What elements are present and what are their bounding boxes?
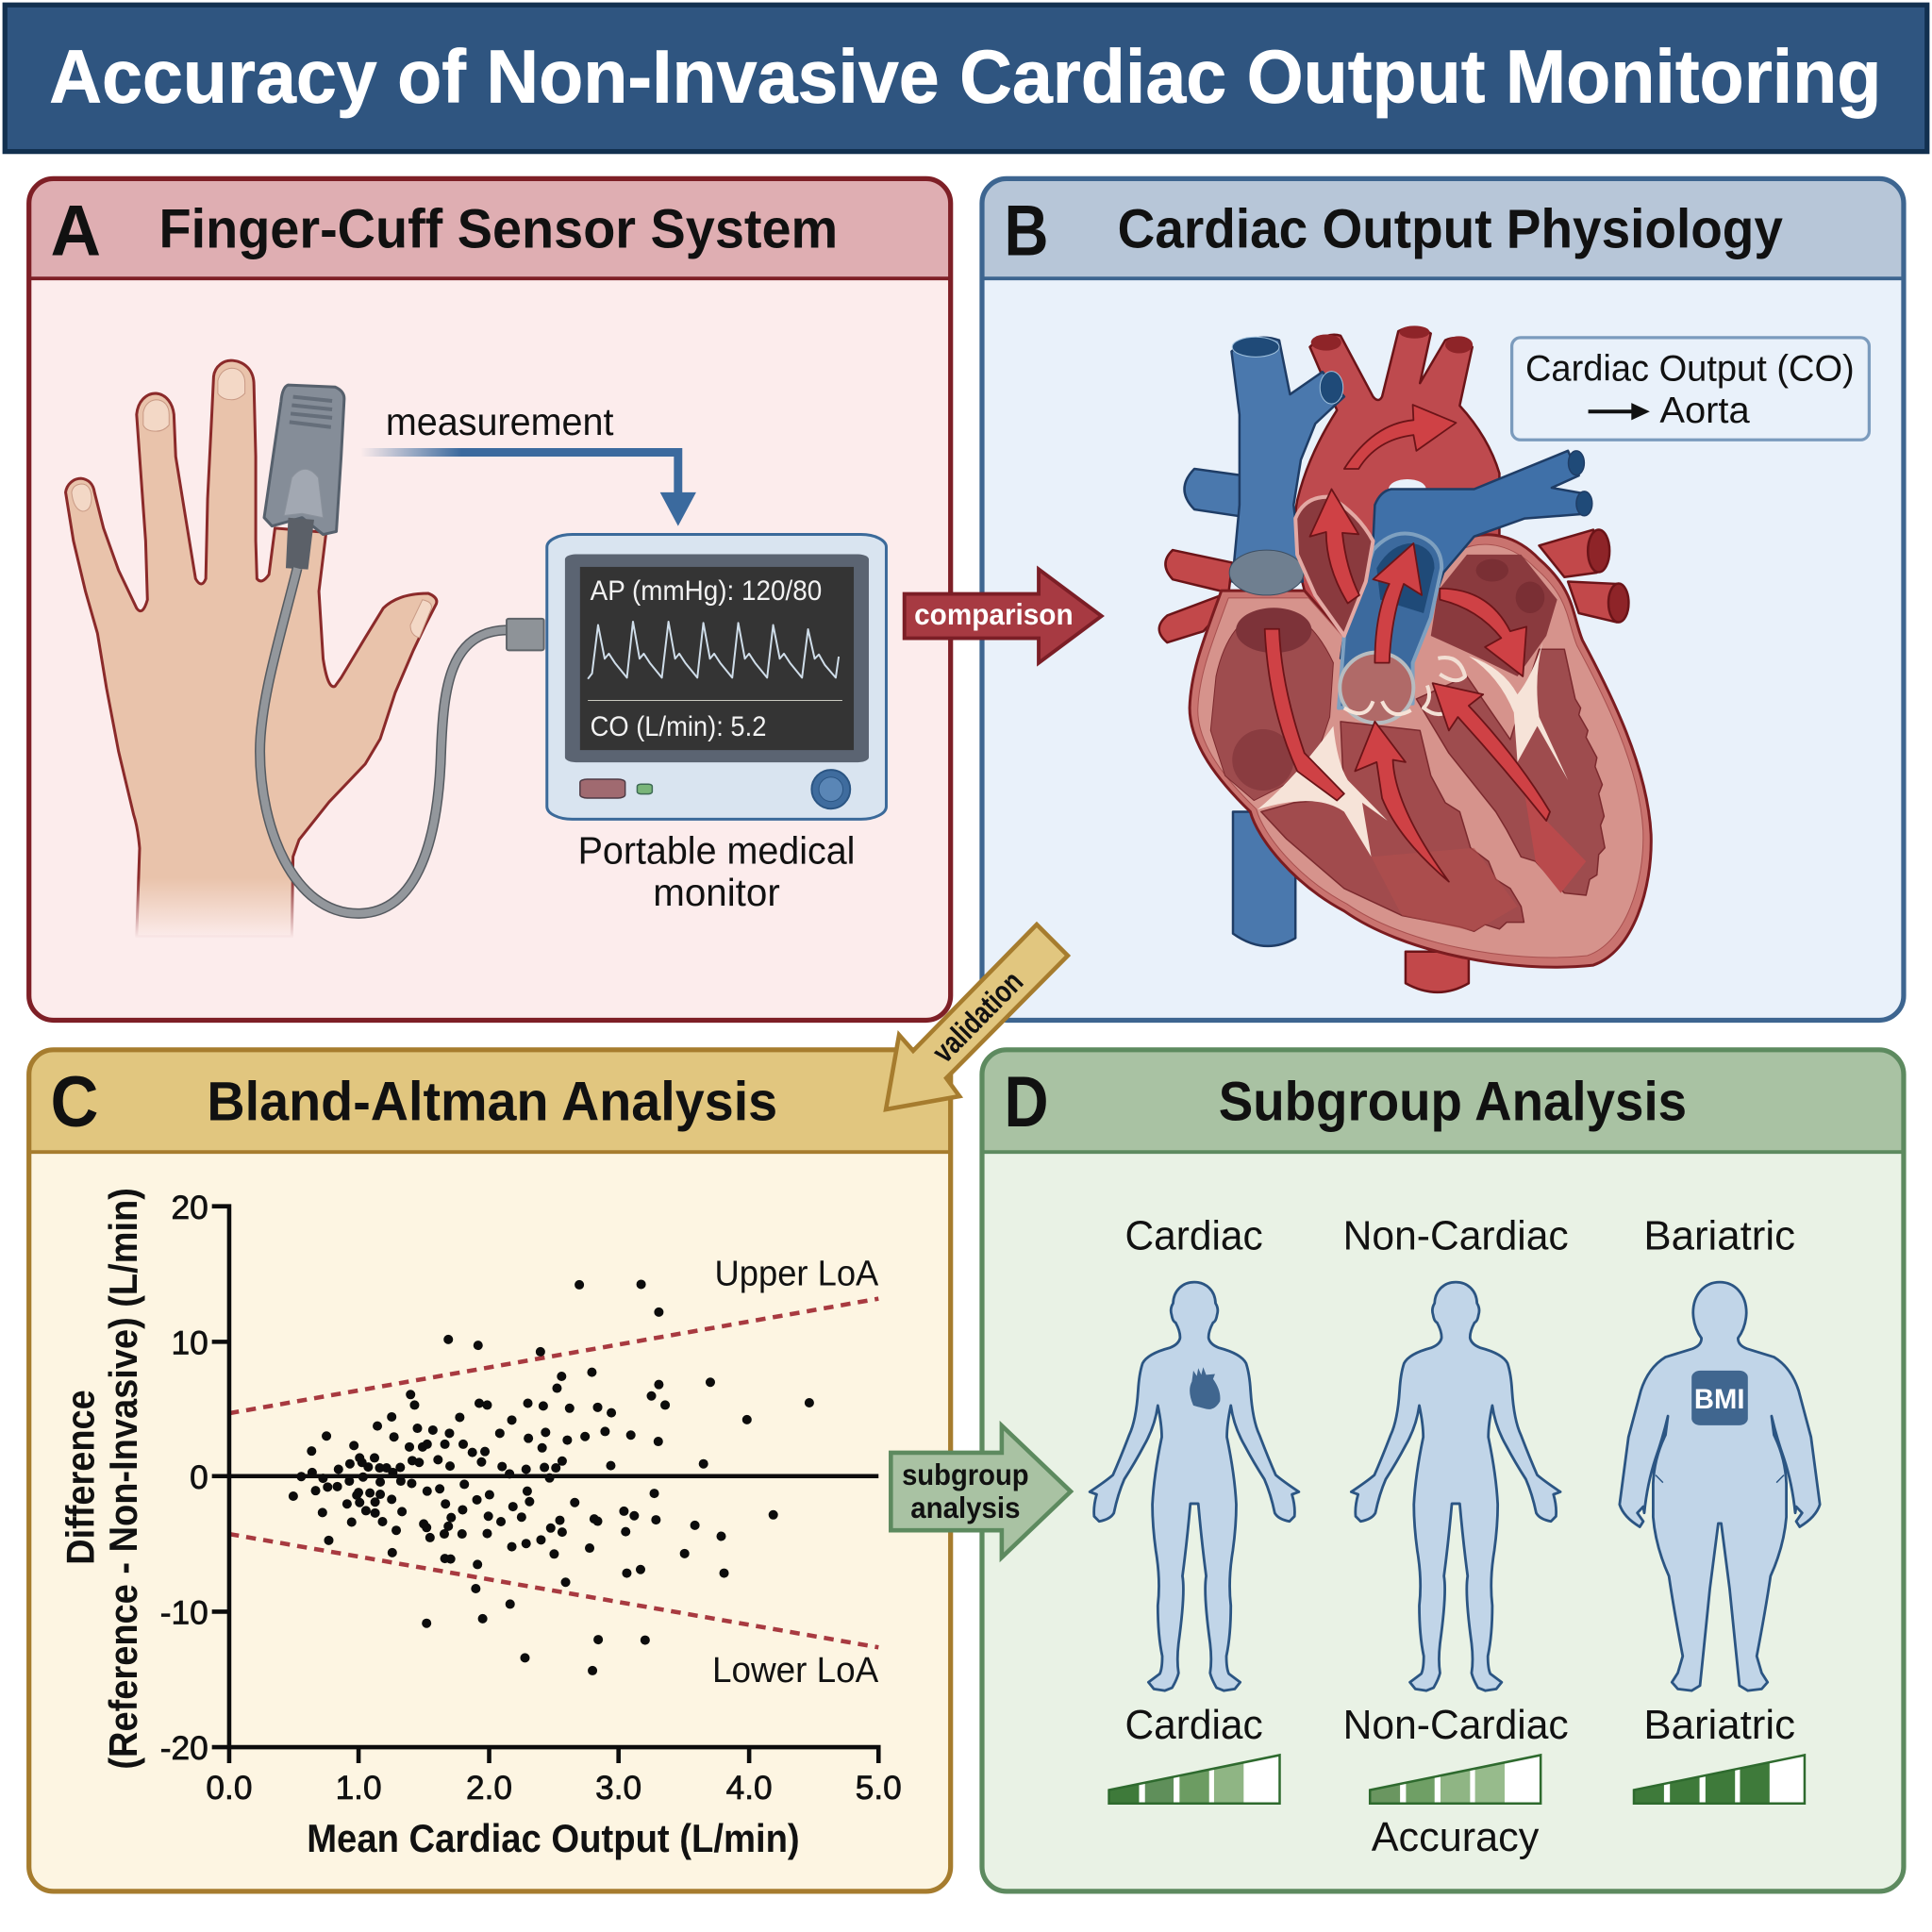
y axis title: Difference	[58, 1390, 102, 1565]
panel D: subgroup analysis	[982, 1050, 1904, 1891]
limits of agreement lines	[229, 1299, 878, 1647]
accuracy label: Accuracy	[1372, 1815, 1540, 1860]
monitor caption: monitor	[653, 871, 780, 914]
figure: cardiac patient	[1090, 1282, 1299, 1690]
y axis tick labels: -20	[160, 1730, 208, 1767]
arrow: subgroup analysis: subgroup	[902, 1458, 1029, 1491]
measurement arrow: measurement	[386, 400, 613, 443]
y axis tick labels	[160, 1190, 208, 1767]
arrow: subgroup analysis	[891, 1425, 1071, 1557]
axes	[212, 1207, 878, 1763]
panel B heading: Cardiac Output Physiology	[1118, 199, 1783, 260]
panel A: finger-cuff sensor system	[29, 178, 951, 1020]
subgroup bottom labels: Bariatric	[1643, 1703, 1795, 1748]
accuracy ramp: cardiac	[1109, 1755, 1280, 1804]
cable	[260, 568, 544, 913]
subgroup top labels: Bariatric	[1643, 1213, 1795, 1258]
title banner	[5, 5, 1927, 152]
x axis tick labels: 1.0	[336, 1770, 382, 1807]
callout: cardiac output to aorta	[1512, 338, 1869, 440]
monitor caption	[578, 829, 855, 914]
BMI badge text: BMI	[1694, 1384, 1744, 1415]
panel C heading: C	[51, 1062, 98, 1142]
x axis tick labels	[206, 1770, 902, 1807]
panel C: bland-altman analysis	[29, 1050, 951, 1891]
y axis tick labels: 20	[172, 1190, 208, 1226]
x axis title: Mean Cardiac Output (L/min)	[307, 1816, 800, 1860]
panel B heading: B	[1004, 191, 1049, 271]
panel B heading	[1004, 191, 1783, 271]
data points	[293, 1284, 809, 1671]
icon: small heart	[1190, 1367, 1220, 1409]
icon: portable medical monitor: AP (mmHg): 120/80	[591, 575, 822, 607]
y axis title: (Reference - Non-Invasive) (L/min)	[101, 1188, 145, 1770]
x axis tick labels: 2.0	[466, 1770, 512, 1807]
figure: bariatric patient	[1620, 1282, 1820, 1690]
panel C heading: Bland-Altman Analysis	[207, 1071, 777, 1132]
panel A heading: A	[51, 191, 101, 271]
scatter chart	[58, 1188, 902, 1860]
subgroup bottom labels	[1124, 1703, 1795, 1748]
upper LoA label: Upper LoA	[715, 1254, 879, 1293]
accuracy ramp: bariatric	[1634, 1755, 1805, 1804]
lower LoA label: Lower LoA	[712, 1651, 879, 1690]
title banner: Accuracy of Non-Invasive Cardiac Output Monitoring	[49, 34, 1881, 118]
panel D heading: D	[1004, 1062, 1049, 1142]
subgroup top labels: Cardiac	[1124, 1213, 1263, 1258]
x axis tick labels: 3.0	[595, 1770, 641, 1807]
y axis tick labels: 0	[190, 1459, 208, 1496]
panel D heading	[1004, 1062, 1687, 1142]
accuracy ramp: non-cardiac	[1370, 1755, 1541, 1804]
y axis title	[58, 1188, 145, 1770]
heart diagram	[1159, 325, 1651, 992]
callout: cardiac output to aorta: Aorta	[1659, 391, 1750, 431]
subgroup top labels	[1124, 1213, 1795, 1258]
callout: cardiac output to aorta: Cardiac Output (CO)	[1525, 349, 1855, 390]
measurement arrow	[360, 400, 696, 526]
panel A heading	[51, 191, 838, 271]
y axis tick labels: 10	[172, 1324, 208, 1361]
panel C heading	[51, 1062, 777, 1142]
subgroup bottom labels: Non-Cardiac	[1343, 1703, 1569, 1748]
figure: non-cardiac patient	[1351, 1282, 1560, 1690]
x axis tick labels: 4.0	[726, 1770, 773, 1807]
arrow: comparison	[905, 569, 1102, 663]
subgroup bottom labels: Cardiac	[1124, 1703, 1263, 1748]
arrow: validation	[886, 924, 1068, 1109]
arrow: validation: validation	[925, 964, 1029, 1069]
arrow: subgroup analysis: analysis	[910, 1491, 1020, 1524]
x axis tick labels: 5.0	[856, 1770, 902, 1807]
panel A heading: Finger-Cuff Sensor System	[158, 199, 838, 260]
x axis tick labels: 0.0	[206, 1770, 252, 1807]
panel B: cardiac output physiology	[982, 178, 1904, 1020]
icon: finger-cuff sensor	[264, 385, 344, 570]
icon: portable medical monitor: CO (L/min): 5.2	[591, 711, 766, 742]
monitor caption: Portable medical	[578, 829, 855, 873]
icon: portable medical monitor	[547, 535, 886, 819]
panel D heading: Subgroup Analysis	[1219, 1071, 1687, 1132]
arrow: comparison: comparison	[914, 598, 1074, 631]
y axis tick labels: -10	[160, 1594, 208, 1631]
icon: hand	[66, 360, 437, 939]
subgroup top labels: Non-Cardiac	[1343, 1213, 1569, 1258]
